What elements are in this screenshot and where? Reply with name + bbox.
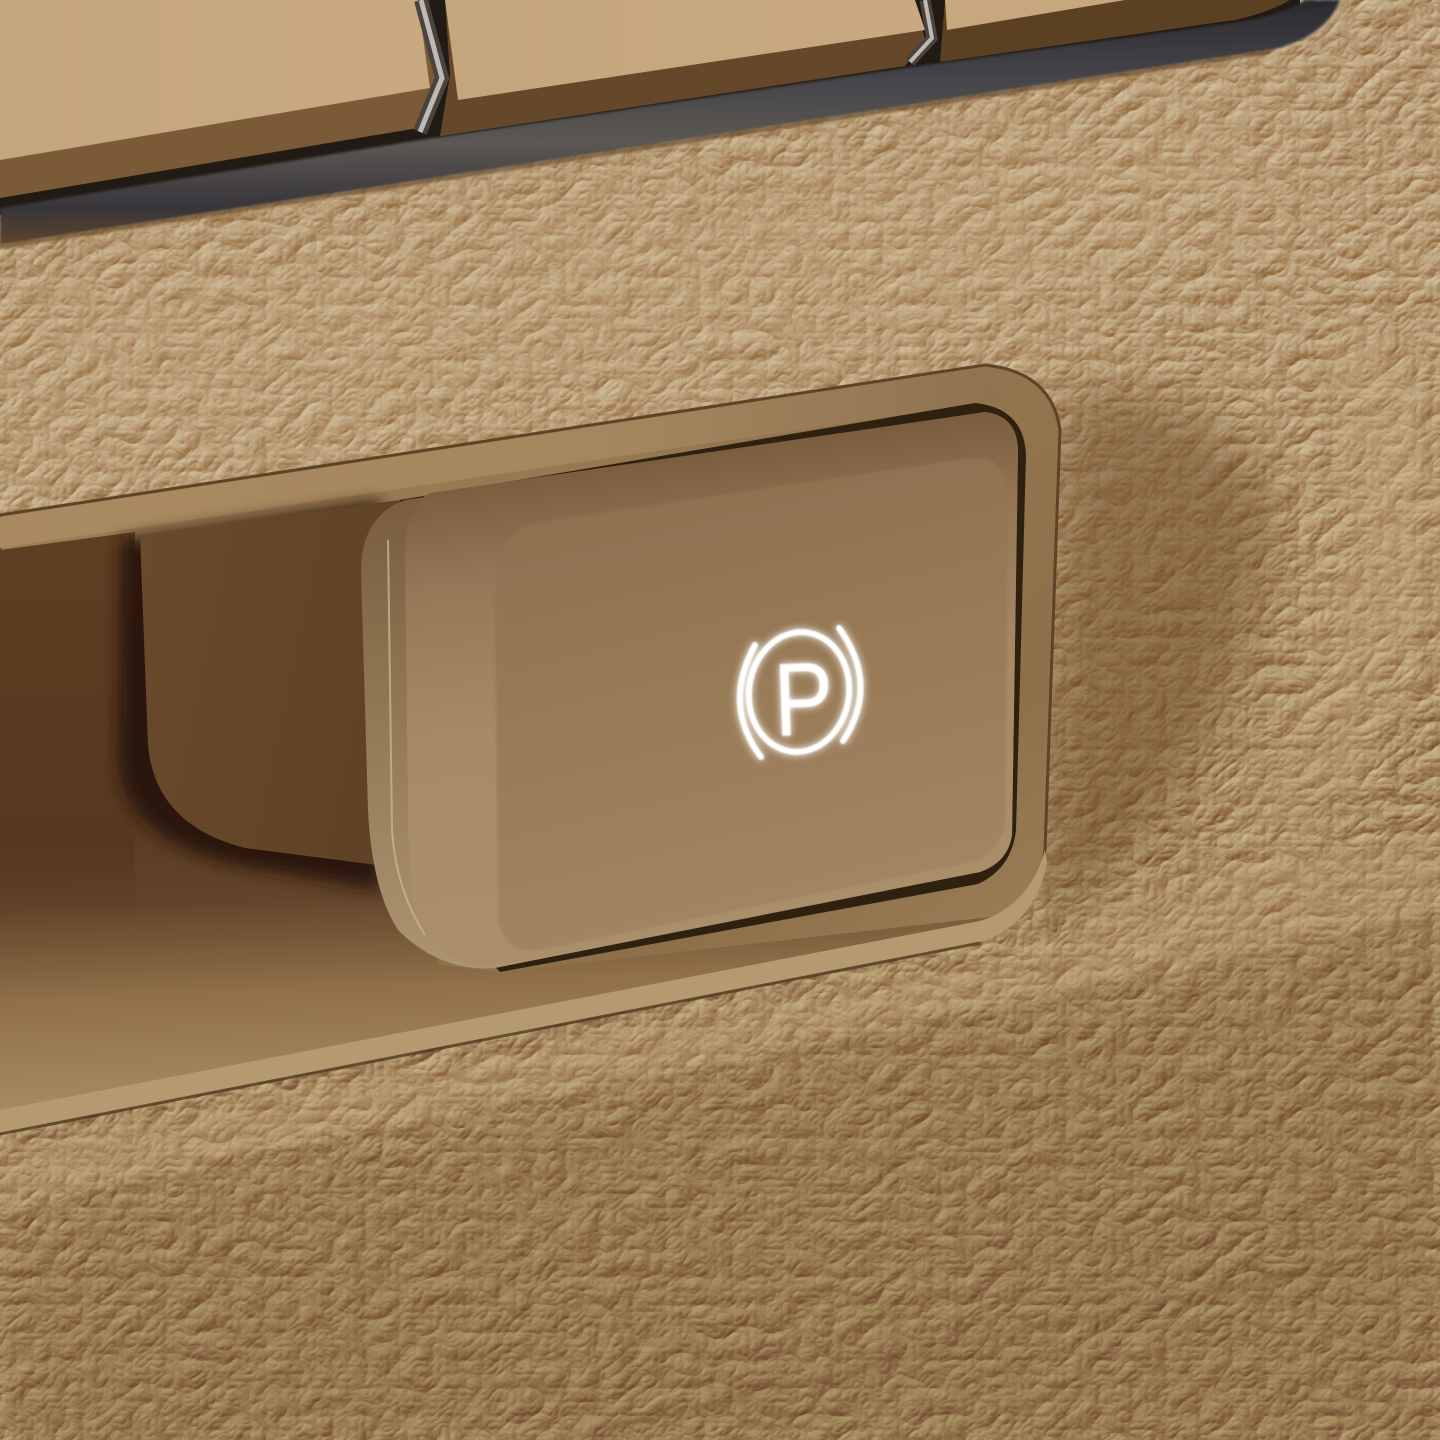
switch body xyxy=(405,412,1018,966)
switch outer edge xyxy=(361,412,1018,968)
chrome divider right xyxy=(910,0,932,62)
dark metal trim strip xyxy=(0,0,1340,245)
parking brake switch xyxy=(361,403,1026,972)
button left xyxy=(0,0,447,198)
lower tray lip xyxy=(0,850,1047,1133)
recess interior left wall xyxy=(0,532,135,915)
button middle xyxy=(440,0,925,136)
seam: bottom panel edge xyxy=(560,1242,1440,1440)
switch edge highlight xyxy=(388,540,425,935)
dark line under tray lip xyxy=(0,943,980,1134)
seam: lower panel crease xyxy=(0,916,1440,1218)
recess surround frame xyxy=(0,365,1060,1112)
shadow under trim xyxy=(0,52,1270,247)
switch shadow gap xyxy=(400,403,1026,972)
icon: letter P: P xyxy=(772,640,835,759)
recess upper lip xyxy=(0,367,1000,548)
switch bank: upper buttons xyxy=(0,0,1300,215)
switch face xyxy=(495,458,1008,951)
icon: circle xyxy=(741,626,857,758)
icon: left arc xyxy=(740,645,761,757)
chrome divider left xyxy=(420,0,442,132)
button right xyxy=(940,0,1290,62)
recess interior floor xyxy=(0,760,1000,1112)
illuminated P icon xyxy=(740,626,861,759)
button bank dark underlay xyxy=(0,0,1300,215)
icon: right arc xyxy=(839,628,861,741)
switch back block xyxy=(118,500,400,890)
